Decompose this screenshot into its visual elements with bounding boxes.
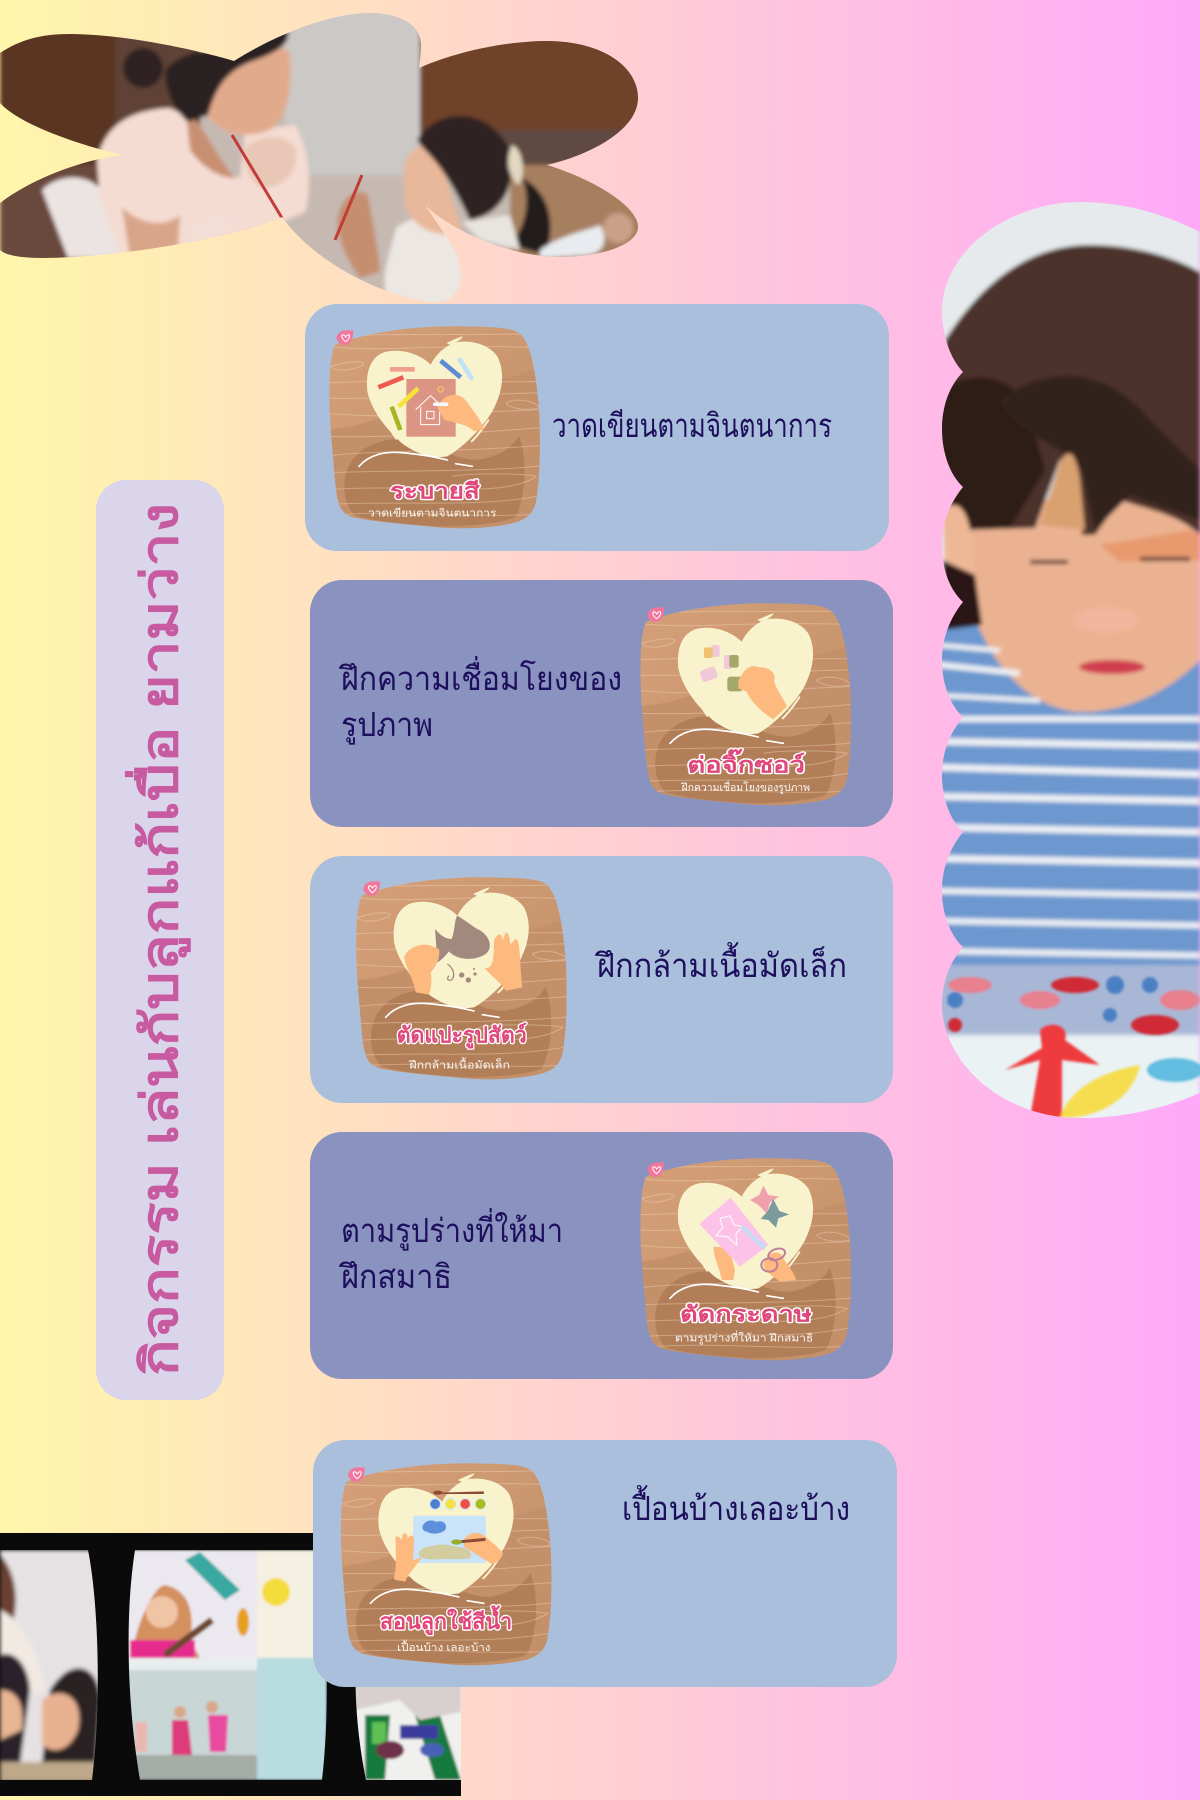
icon: colouring crayons card (330, 326, 540, 528)
panel text: ฝึกกล้ามเนื้อมัดเล็ก (594, 942, 847, 984)
panel 4: paper cutting (310, 1132, 893, 1379)
panel text: ฝึกความเชื่อมโยงของ (338, 656, 622, 697)
panel text: เปื้อนบ้างเลอะบ้าง (622, 1485, 850, 1527)
panel 5: water colours (313, 1440, 897, 1687)
panel text (338, 1208, 563, 1295)
frame: girl with instruments, ballet class (127, 1550, 327, 1780)
icon: paper cutting card (640, 1158, 851, 1360)
photo collage film strip (0, 1533, 465, 1796)
frame: hand painting on striped mat (356, 1687, 461, 1780)
panel text: รูปภาพ (341, 706, 433, 745)
panel 1: drawing (305, 304, 889, 551)
icon: jigsaw card (640, 603, 851, 806)
icon: water colour card (341, 1463, 552, 1666)
title text (rotated): กิจกรรม เล่นกับลูกแก้เบื่อ ยามว่าง (125, 503, 191, 1376)
icon: jigsaw card: ฝึกความเชื่อมโยงของรูปภาพ (681, 780, 810, 794)
panel text (338, 656, 622, 745)
photo: mother and daughter drawing, flower-shaped (0, 13, 638, 302)
icon: clay fish card: ตัดแปะรูปสัตว์ (397, 1023, 527, 1050)
panel 2: jigsaw (310, 580, 893, 827)
icon: jigsaw card: ต่อจิ๊กซอว์ (687, 749, 805, 778)
icon: clay fish card: ฝึกกล้ามเนื้อมัดเล็ก (408, 1056, 510, 1071)
icon: water colour card: เปื้อนบ้าง เลอะบ้าง (397, 1639, 491, 1654)
panel 3: clay animals (310, 856, 893, 1103)
panel text: วาดเขียนตามจินตนาการ (552, 407, 832, 444)
icon: paper cutting card: ตัดกระดาษ (680, 1302, 812, 1327)
icon: colouring crayons card: วาดเขียนตามจินตนาการ (368, 507, 497, 520)
photo: child looking down, scalloped shape (930, 190, 1200, 1130)
icon: clay fish card (356, 877, 566, 1080)
frame: family eating (0, 1550, 105, 1782)
icon: colouring crayons card: ระบายสี (390, 478, 480, 503)
panel text: ฝึกสมาธิ (338, 1258, 452, 1295)
panel text: ตามรูปร่างที่ให้มา (341, 1208, 563, 1251)
icon: water colour card: สอนลูกใช้สีน้ำ (380, 1605, 512, 1636)
icon: paper cutting card: ตามรูปร่างที่ให้มา ฝึกสมาธิ (675, 1331, 813, 1345)
title banner pill (96, 480, 224, 1400)
